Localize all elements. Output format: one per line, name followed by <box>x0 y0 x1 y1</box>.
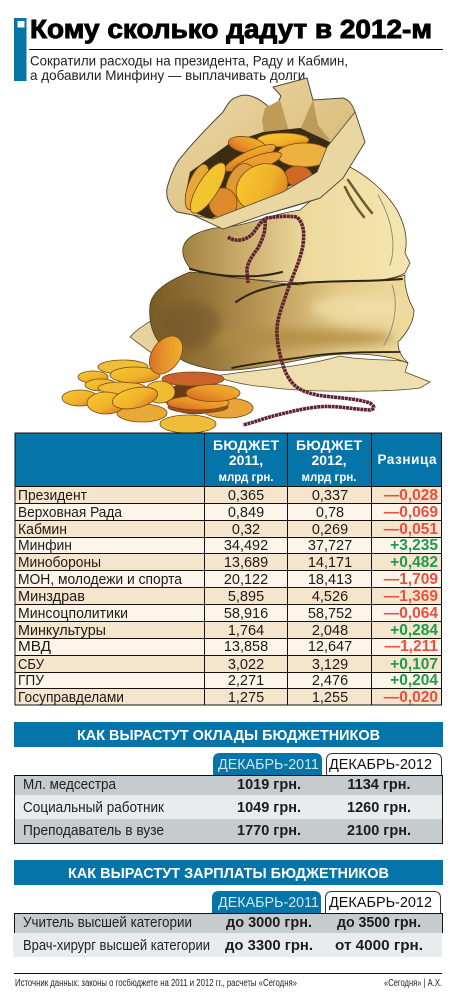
table rows: 2,048 <box>312 623 348 639</box>
table rows: 2,271 <box>228 673 264 689</box>
table rows: 14,171 <box>308 555 352 571</box>
panel: budget table <box>15 433 442 706</box>
pay table: от 4000 грн. <box>335 938 423 954</box>
table rows: 3,129 <box>312 657 348 673</box>
table rows: 1,275 <box>228 690 264 706</box>
salary table <box>14 775 442 844</box>
table header <box>15 433 442 486</box>
salary table: 1260 грн. <box>347 800 411 816</box>
footer <box>14 973 442 989</box>
table rows: СБУ <box>18 657 45 673</box>
table rows <box>18 487 438 706</box>
source note: Источник данных: законы о госбюджете на 2011 и 2012 гг., расчеты «Сегодня» <box>15 977 297 989</box>
table rows: Минсоцполитики <box>18 606 128 622</box>
sack neck <box>262 100 330 140</box>
column heading: budget 2011: 2011, <box>229 452 263 468</box>
title: Кому сколько дадут в 2012-м <box>30 16 432 44</box>
sack lower lobe <box>150 272 414 370</box>
tab: December 2011 <box>212 891 321 913</box>
table rows: 13,689 <box>224 555 268 571</box>
table rows: 1,764 <box>228 623 264 639</box>
subtitle: Сократили расходы на президента, Раду и Кабмин, <box>30 52 348 68</box>
table rows: 34,492 <box>224 538 268 554</box>
table rows: 2,476 <box>312 673 348 689</box>
salary table: 1019 грн. <box>237 777 301 793</box>
table rows: 4,526 <box>312 589 348 605</box>
pay table: Учитель высшей категории <box>23 914 192 931</box>
table rows: ГПУ <box>18 673 45 689</box>
table rows: МВД <box>18 639 51 655</box>
salary table: 1770 грн. <box>237 823 301 839</box>
table rows: Минздрав <box>18 589 85 605</box>
table rows: Минкультуры <box>18 623 106 639</box>
table rows: +3,235 <box>390 537 438 554</box>
tab: December 2012 <box>326 754 442 775</box>
table row backgrounds <box>15 486 442 705</box>
sack lower lobe shading <box>160 295 400 349</box>
sack bottom flaps <box>130 320 430 391</box>
table rows: —0,020 <box>384 689 438 706</box>
table rows: Госуправделами <box>18 690 124 706</box>
salary table: Преподаватель в вузе <box>23 823 164 839</box>
panel: base salaries <box>14 722 443 844</box>
table rows: +0,284 <box>390 622 438 639</box>
panel: total pay <box>13 860 443 957</box>
table rows: Кабмин <box>18 522 67 538</box>
heading block <box>14 16 443 83</box>
table rows: —0,028 <box>384 487 438 504</box>
coins inside the sack <box>180 133 331 220</box>
table rows: 20,122 <box>224 572 268 588</box>
drawstring cord <box>228 216 374 425</box>
section heading: КАК ВЫРАСТУТ ЗАРПЛАТЫ БЮДЖЕТНИКОВ <box>68 865 389 882</box>
illustration: sack of gold coins <box>62 78 430 433</box>
table rows: 0,269 <box>312 522 348 538</box>
salary table: Социальный работник <box>23 800 165 816</box>
table rows: 12,647 <box>308 639 352 655</box>
table rows: 18,413 <box>308 572 352 588</box>
table rows: 0,849 <box>228 505 264 521</box>
section heading: КАК ВЫРАСТУТ ОКЛАДЫ БЮДЖЕТНИКОВ <box>77 727 380 744</box>
table rows: 5,895 <box>228 589 264 605</box>
spilled coins <box>62 330 253 433</box>
pay table: Врач-хирург высшей категории <box>23 937 210 954</box>
section heading <box>14 860 443 885</box>
column heading: budget 2012: млрд грн. <box>301 472 357 484</box>
sack front lip <box>193 112 365 229</box>
subtitle: а добавили Минфину — выплачивать долги. <box>30 67 309 83</box>
column heading: budget 2011: БЮДЖЕТ <box>213 437 279 453</box>
pay table <box>13 913 442 957</box>
column heading: budget 2011: млрд грн. <box>218 472 274 484</box>
table rows: Минобороны <box>18 555 101 571</box>
icon: blue heading marker <box>14 18 26 81</box>
tab: December 2011 <box>213 753 322 775</box>
table rows: —0,069 <box>384 504 438 521</box>
tab: December 2012 <box>326 892 440 913</box>
tab: December 2011: ДЕКАБРЬ-2011 <box>218 757 319 773</box>
table rows: 58,752 <box>308 606 352 622</box>
table rows: +0,204 <box>390 672 438 689</box>
column heading: budget 2012: 2012, <box>311 452 347 468</box>
column heading: budget 2012: БЮДЖЕТ <box>296 437 362 453</box>
table rows: Минфин <box>18 538 72 554</box>
pay table: до 3000 грн. <box>226 915 312 931</box>
table rows: —0,064 <box>384 605 438 622</box>
table rows: —1,709 <box>384 571 438 588</box>
table rows: 0,78 <box>316 505 344 521</box>
table rows: —1,211 <box>385 638 438 655</box>
table rows: 58,916 <box>224 606 268 622</box>
pay table: до 3300 грн. <box>225 938 313 954</box>
salary table: 1049 грн. <box>237 800 301 816</box>
table rows: +0,482 <box>390 554 438 571</box>
table rows: 0,365 <box>228 488 264 504</box>
column heading: difference: Разница <box>378 452 437 467</box>
tab: December 2012: ДЕКАБРЬ-2012 <box>329 895 432 911</box>
table rows: 0,337 <box>312 488 348 504</box>
table rows: 0,32 <box>232 522 260 538</box>
tab: December 2012: ДЕКАБРЬ-2012 <box>329 757 432 773</box>
table rows: Президент <box>18 488 87 504</box>
table rows: 3,022 <box>228 657 264 673</box>
sack creases <box>190 180 402 368</box>
table rows: —0,051 <box>384 521 438 538</box>
table rows: +0,107 <box>390 656 438 673</box>
sack mouth <box>167 78 365 229</box>
table rows: —1,369 <box>384 588 438 605</box>
table rows: Верховная Рада <box>18 505 123 521</box>
tab: December 2011: ДЕКАБРЬ-2011 <box>218 895 319 911</box>
salary table: 2100 грн. <box>347 823 411 839</box>
table rows: 37,727 <box>308 538 352 554</box>
salary table: 1134 грн. <box>347 777 411 793</box>
table rows: МОН, молодежи и спорта <box>18 572 183 588</box>
table rows: 13,858 <box>224 639 268 655</box>
salary table: Мл. медсестра <box>23 777 117 793</box>
section heading <box>14 722 443 747</box>
pay table: до 3500 грн. <box>337 915 421 931</box>
table rows: 1,255 <box>312 690 348 706</box>
sack upper lobe <box>183 167 410 283</box>
